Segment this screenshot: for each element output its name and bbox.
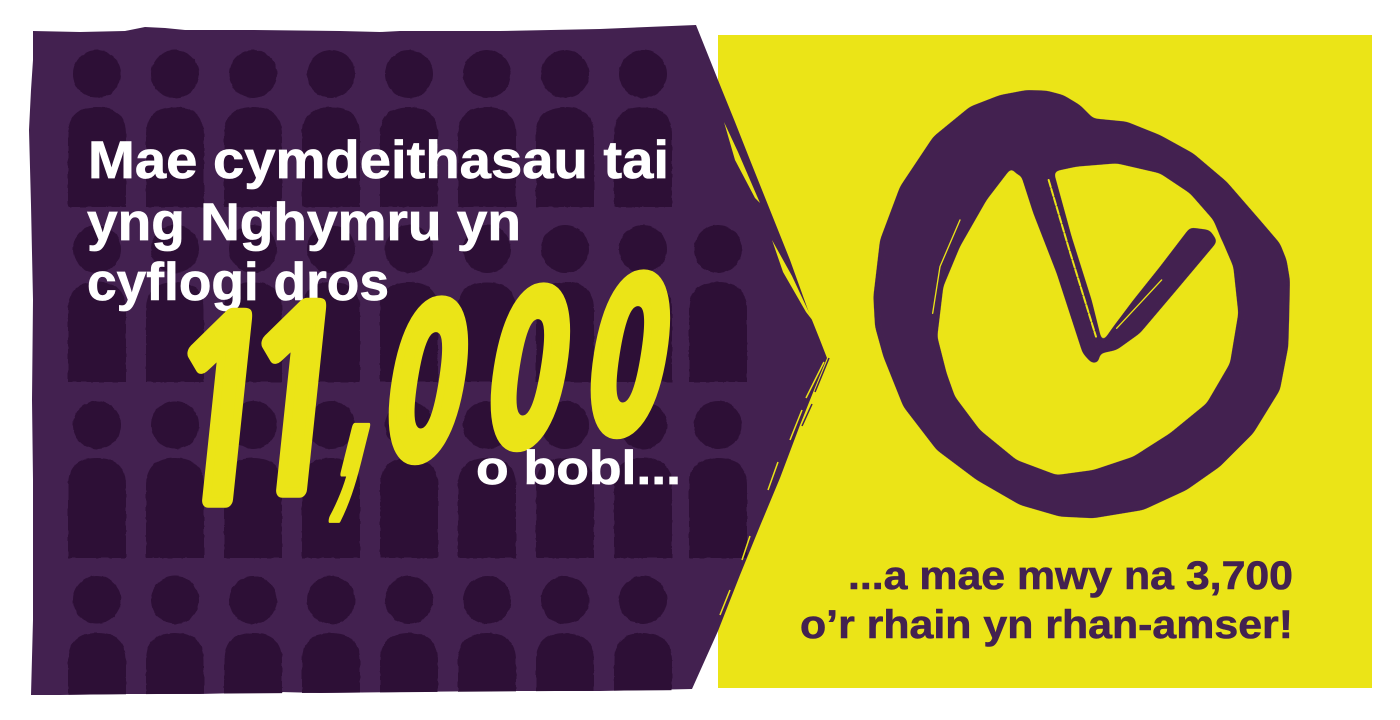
heading text: cyflogi dros bbox=[87, 253, 389, 312]
heading text: yng Nghymru yn bbox=[87, 193, 521, 252]
big number 11,000: , bbox=[319, 200, 432, 536]
people row 2 bbox=[68, 225, 747, 382]
text: part-time caption bbox=[800, 554, 1293, 647]
heading text: Mae cymdeithasau tai bbox=[88, 131, 669, 190]
arrow shape bbox=[29, 25, 827, 695]
people row 1 bbox=[68, 50, 672, 207]
big number 11,000: 1 bbox=[145, 292, 298, 540]
people row 3 bbox=[68, 401, 747, 558]
icon: hand-painted clock bbox=[873, 90, 1290, 518]
brush scratches bbox=[933, 180, 1162, 337]
big number 11,000: 0 bbox=[470, 200, 595, 504]
clock ring and hands bbox=[873, 90, 1290, 518]
text: o bobl: o bobl... bbox=[476, 441, 681, 494]
big number 11,000 bbox=[145, 187, 695, 540]
big number 11,000: 0 bbox=[368, 213, 493, 517]
text: part-time caption: ...a mae mwy na 3,700 bbox=[848, 554, 1293, 598]
big number 11,000: 0 bbox=[570, 187, 695, 491]
people pattern bbox=[68, 50, 747, 720]
big number 11,000: 1 bbox=[219, 282, 372, 530]
panel: yellow background bbox=[718, 35, 1372, 688]
panel: purple arrow bbox=[29, 25, 829, 720]
brush scratches on arrow edge bbox=[720, 122, 829, 615]
people row 4 bbox=[68, 576, 672, 695]
heading text bbox=[87, 131, 669, 312]
text: part-time caption: o’r rhain yn rhan-amser! bbox=[800, 603, 1293, 647]
